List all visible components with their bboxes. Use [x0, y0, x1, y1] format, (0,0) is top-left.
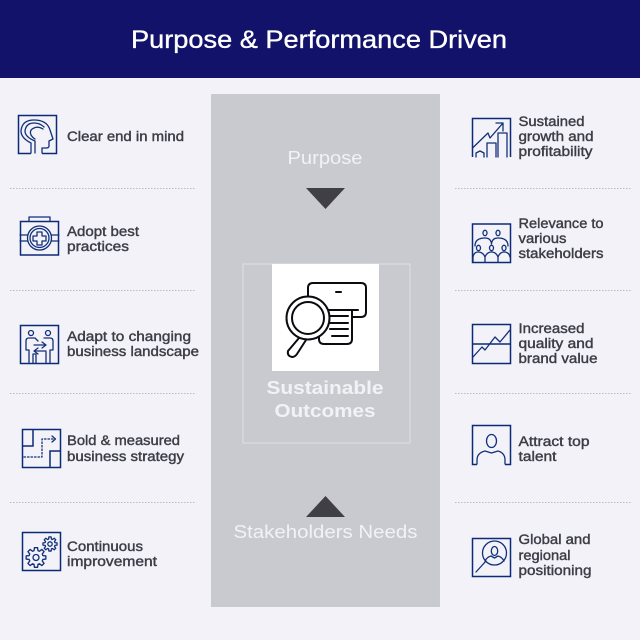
- item: continuous improvement: [22, 532, 157, 570]
- icon: growth chart: [472, 118, 510, 157]
- label: Attract top: [518, 434, 590, 449]
- item: relevance to various stakeholders: [472, 216, 604, 262]
- title: Purpose & Performance Driven: [131, 26, 507, 54]
- item: bold and measured business strategy: business strategy: [67, 449, 184, 464]
- item: adopt best practices: [20, 217, 139, 255]
- arrow: down: [306, 188, 345, 209]
- item: relevance to various stakeholders: stakeholders: [518, 246, 604, 261]
- item: increased quality and brand value: [472, 321, 598, 366]
- label: sustainable outcomes: Sustainable: [266, 378, 384, 398]
- item: global and regional positioning: regional: [518, 548, 570, 563]
- item: sustained growth and profitability: [472, 114, 594, 159]
- item: continuous improvement: improvement: [67, 554, 157, 569]
- label: Clear end in mind: [67, 129, 184, 144]
- label: Increased: [518, 321, 584, 336]
- arrow: up: [306, 496, 345, 517]
- icon: document under magnifier: [272, 264, 379, 371]
- icon: head profile: [18, 116, 56, 154]
- label: Relevance to: [518, 216, 604, 231]
- label: Continuous: [67, 539, 143, 554]
- panel: central column: [211, 94, 440, 607]
- icon: two people exchanging: [20, 326, 58, 364]
- item: adapt to changing business landscape: [20, 326, 199, 364]
- icon: line chart: [472, 324, 510, 364]
- item: adapt to changing business landscape: business landscape: [67, 344, 199, 359]
- item: global and regional positioning: [472, 532, 592, 578]
- item: relevance to various stakeholders: various: [518, 231, 567, 246]
- label: Global and: [518, 532, 590, 547]
- heading: purpose: Purpose: [288, 148, 362, 168]
- panel: sustainable outcomes: [243, 264, 410, 443]
- icon: group of people: [472, 224, 510, 262]
- item: increased quality and brand value: quality and: [518, 336, 594, 351]
- label: Adopt best: [67, 224, 139, 239]
- item: sustained growth and profitability: growth and: [518, 129, 594, 144]
- heading: stakeholders needs: Stakeholders Needs: [234, 522, 418, 542]
- item: attract top talent: talent: [518, 449, 557, 464]
- icon: person: [472, 426, 510, 464]
- item: increased quality and brand value: brand value: [518, 351, 598, 366]
- icon: person in magnifier: [472, 538, 510, 576]
- label: Adapt to changing: [67, 329, 191, 344]
- panel: sustainable outcomes: Outcomes: [274, 401, 376, 421]
- item: adopt best practices: practices: [67, 239, 129, 254]
- item: global and regional positioning: positioning: [518, 563, 592, 578]
- label: Bold & measured: [67, 433, 180, 448]
- item: bold and measured business strategy: [22, 430, 184, 468]
- item: attract top talent: [472, 426, 590, 464]
- header banner: [0, 0, 640, 78]
- item: clear end in mind: [18, 116, 184, 154]
- icon: first aid case: [20, 217, 59, 255]
- label: Sustained: [518, 114, 584, 129]
- icon: gears: [22, 532, 60, 570]
- icon: floor plan path: [22, 430, 61, 468]
- item: sustained growth and profitability: profitability: [518, 144, 593, 159]
